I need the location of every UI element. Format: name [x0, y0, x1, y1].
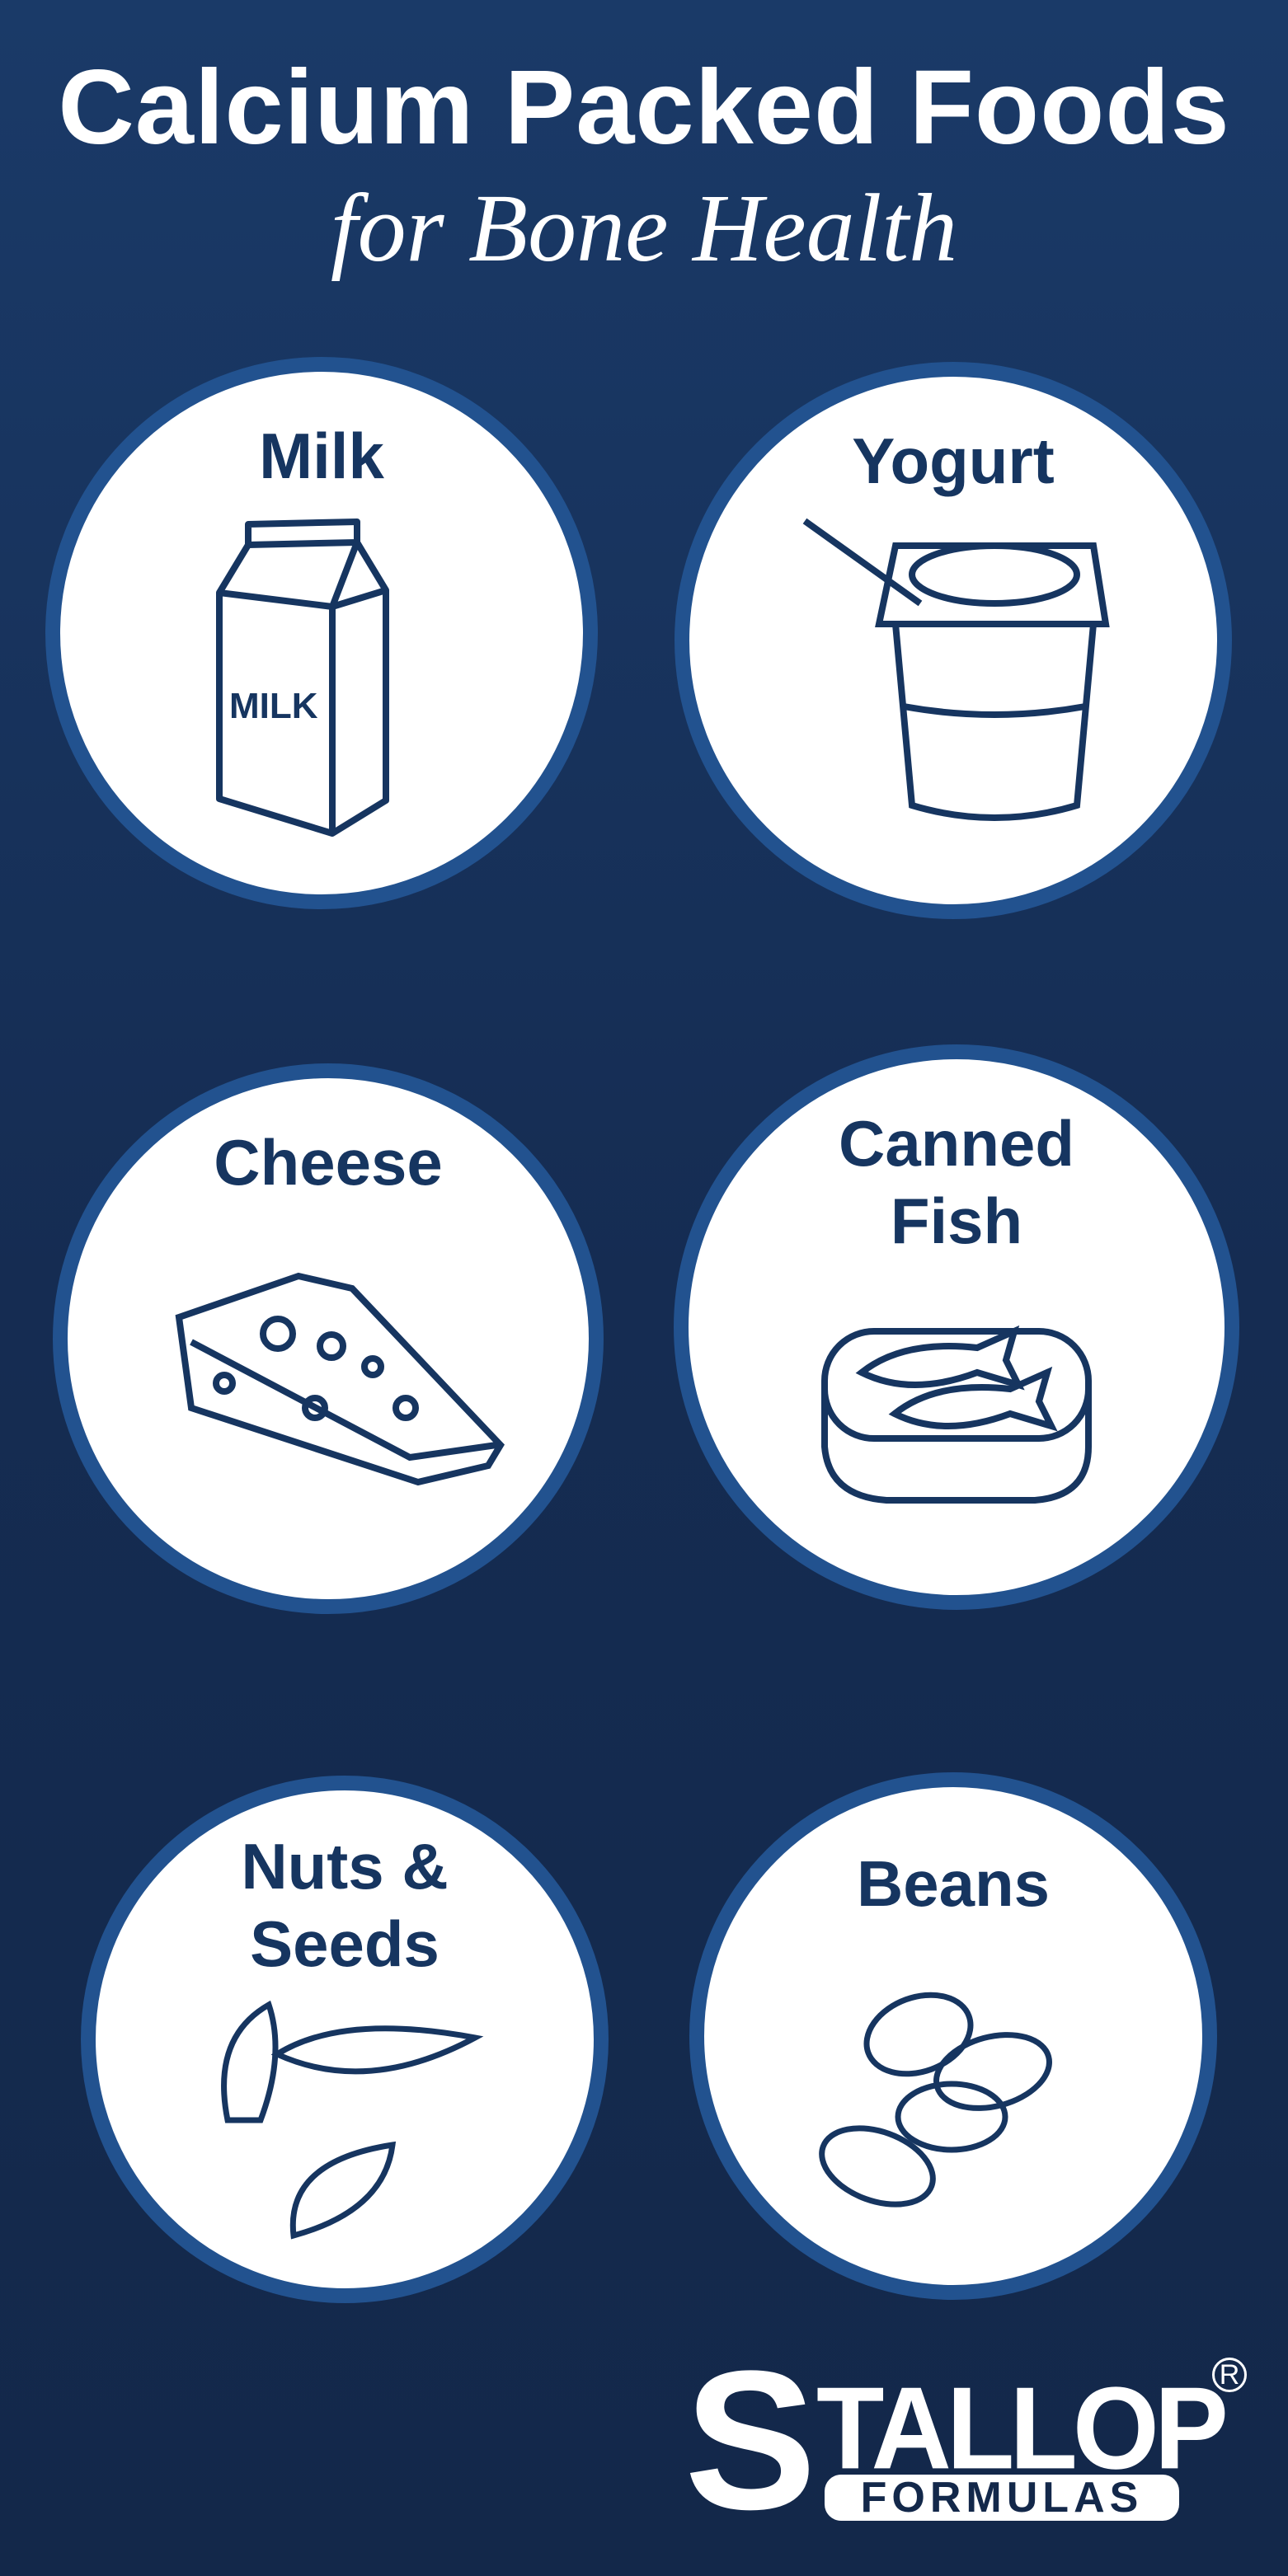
label: canned fish: Canned — [839, 1107, 1074, 1180]
label: nuts & seeds: Seeds — [250, 1907, 440, 1980]
panel: yogurt — [675, 362, 1232, 919]
icon: cheese wedge — [175, 1273, 505, 1485]
logo: stallop formulas: TALLOP — [816, 2363, 1224, 2494]
label: cheese: Cheese — [214, 1126, 443, 1199]
panel: cheese — [53, 1063, 604, 1614]
logo: stallop formulas: S — [684, 2330, 811, 2550]
icon: beans — [819, 1992, 1052, 2208]
icon: yogurt cup — [803, 518, 1110, 821]
icon: milk carton — [216, 518, 389, 837]
icon: milk carton: MILK — [229, 686, 318, 726]
logo: stallop formulas: FORMULAS — [861, 2474, 1143, 2522]
label: yogurt: Yogurt — [852, 425, 1055, 497]
logo: stallop formulas: R — [1220, 2359, 1239, 2391]
panel: nuts & seeds — [81, 1776, 609, 2303]
label: canned fish — [839, 1107, 1074, 1257]
icon: almonds — [221, 2000, 483, 2239]
label: nuts & seeds — [241, 1830, 449, 1980]
logo: stallop formulas — [684, 2330, 1247, 2550]
label: nuts & seeds: Nuts & — [241, 1830, 449, 1903]
panel: beans — [689, 1772, 1217, 2300]
label: beans: Beans — [857, 1847, 1050, 1920]
icon: sardine can — [821, 1326, 1092, 1504]
label: milk: Milk — [259, 420, 384, 492]
subtitle: for Bone Health — [331, 174, 957, 282]
label: canned fish: Fish — [891, 1185, 1022, 1257]
title: Calcium Packed Foods — [58, 49, 1230, 167]
panel: milk — [45, 357, 598, 909]
panel: canned fish — [674, 1044, 1239, 1610]
